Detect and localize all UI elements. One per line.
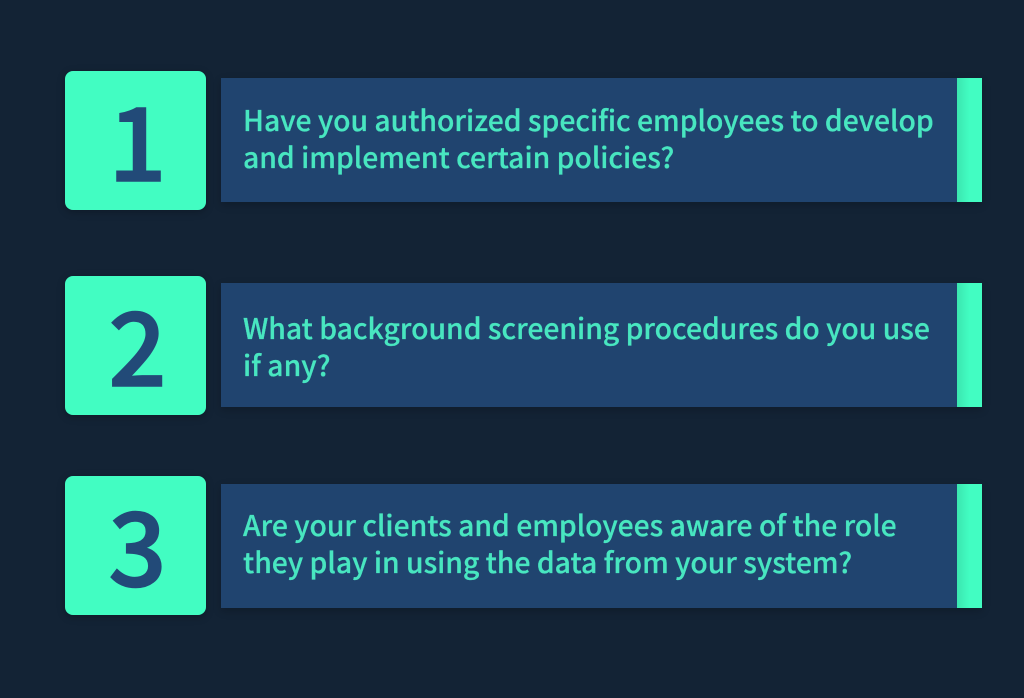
text: question 2: What background screening procedures do you use <box>243 307 930 348</box>
panel: item 1 question <box>221 78 982 202</box>
number 2: 2 <box>108 269 167 416</box>
text: question 1: Have you authorized specific employees to develop <box>243 99 934 140</box>
text: question 2: if any? <box>243 344 331 385</box>
panel: item 1 number <box>65 71 206 210</box>
accent bar 2 <box>957 283 982 407</box>
accent bar 1 <box>957 78 982 202</box>
panel: item 2 question <box>221 283 982 407</box>
text: question 3: Are your clients and employees aware of the role <box>243 504 897 545</box>
number 1: 1 <box>108 64 167 211</box>
panel: item 3 question <box>221 484 982 608</box>
text: question 3 <box>242 504 897 582</box>
text: question 1: and implement certain policies? <box>243 136 674 177</box>
panel: item 3 number <box>65 476 206 615</box>
accent bar 3 <box>957 484 982 608</box>
text: question 1 <box>243 99 934 177</box>
number 3: 3 <box>108 469 167 616</box>
text: question 2 <box>243 307 930 385</box>
text: question 3: they play in using the data from your system? <box>243 541 852 582</box>
panel: item 2 number <box>65 276 206 415</box>
